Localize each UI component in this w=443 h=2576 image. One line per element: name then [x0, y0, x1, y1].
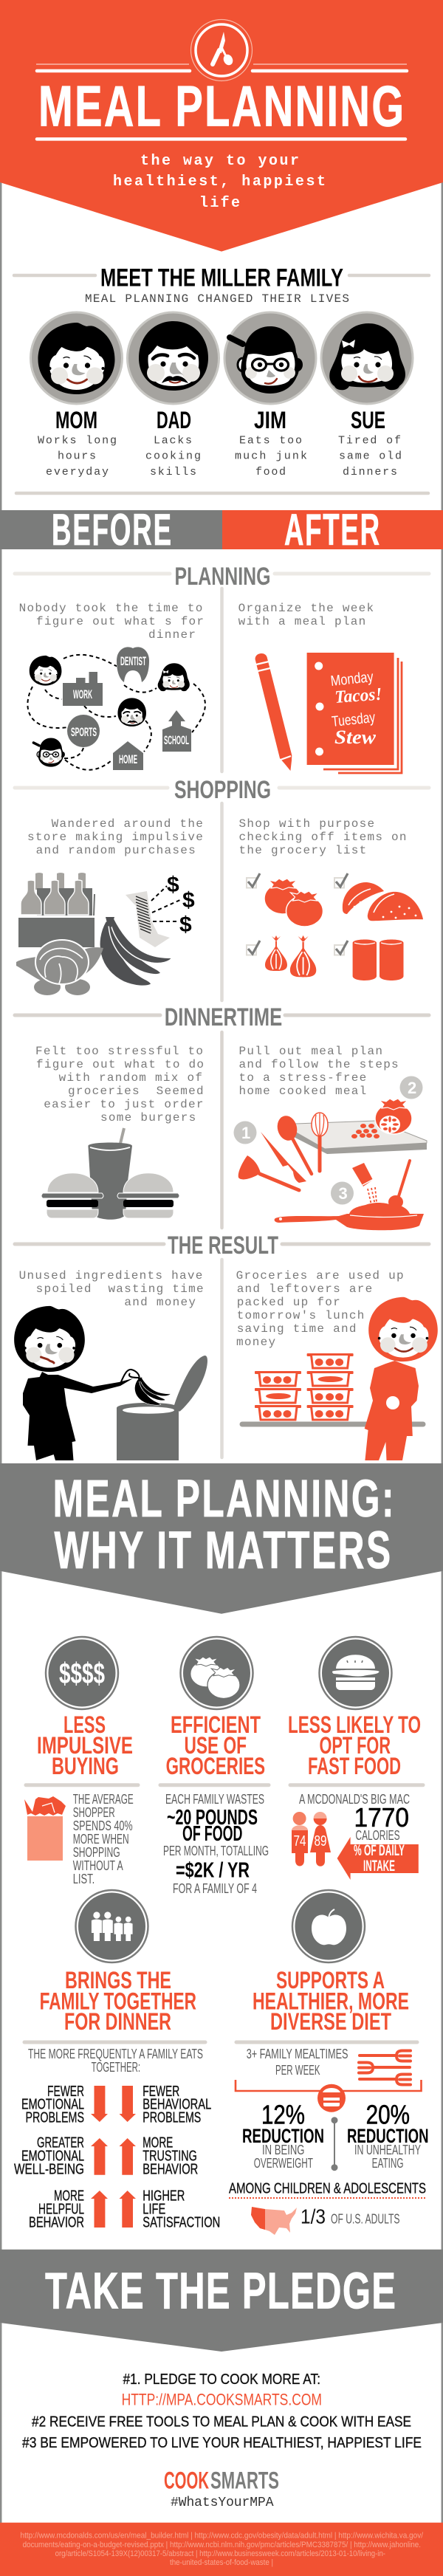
icon: tomato slice	[351, 1099, 412, 1138]
text: shopping before: store making impulsive	[27, 831, 204, 844]
text: planning before: dinner	[148, 628, 196, 642]
footer sources	[0, 2523, 443, 2576]
icon: school	[162, 710, 191, 752]
chaotic schedule map	[27, 647, 205, 770]
text: dinnertime before	[35, 1045, 205, 1124]
family: sue: SUE	[351, 407, 385, 433]
leftovers containers	[255, 1353, 354, 1420]
text: stat: FOR A FAMILY OF 4	[173, 1881, 257, 1896]
stat: 12 percent: IN BEING	[262, 2143, 304, 2157]
text: shopping after: checking off items on	[239, 831, 408, 844]
stat: 12 percent: OVERWEIGHT	[254, 2156, 313, 2171]
heading: SUPPORTS A	[276, 1967, 385, 1993]
icon: spatula	[238, 1155, 299, 1190]
family: dad	[127, 312, 219, 478]
title: MEAL PLANNING	[38, 74, 404, 139]
family: mom	[31, 312, 123, 478]
text: planning before: figure out what s for	[36, 615, 205, 628]
text: shopping after: Shop with purpose	[239, 817, 375, 831]
row: well-being and trust: EMOTIONAL	[21, 2149, 84, 2165]
section heading: shopping: SHOPPING	[174, 776, 271, 804]
text: planning after	[238, 602, 374, 628]
stat: 12 percent: REDUCTION	[242, 2125, 324, 2147]
before / after band	[0, 505, 443, 554]
text: mealtimes	[247, 2047, 348, 2078]
banner: why it matters: WHY IT MATTERS	[55, 1521, 391, 1579]
stat: calories: CALORIES	[356, 1828, 400, 1843]
text: result after: tomorrow's lunch	[237, 1309, 365, 1322]
panel: less impulsive buying	[24, 1637, 138, 1886]
cook smarts logo	[164, 2467, 279, 2510]
heading	[40, 1967, 196, 2035]
heading: LESS	[63, 1711, 106, 1738]
arrow: percent of daily intake: % OF DAILY	[354, 1842, 405, 1859]
row: helpful behavior and satisfaction	[29, 2188, 220, 2231]
banner: why it matters: MEAL PLANNING:	[53, 1469, 394, 1528]
text: dinnertime after: and follow the steps	[239, 1058, 399, 1071]
pledge steps	[22, 2371, 422, 2451]
stat: one third of adults: 1/3	[301, 2205, 326, 2228]
icon: knife	[261, 1132, 306, 1183]
text: result after	[236, 1269, 405, 1349]
icon: calorie people	[292, 1812, 331, 1866]
text: result after: packed up for	[237, 1296, 341, 1309]
text: result before	[19, 1269, 205, 1309]
small face: sue	[158, 663, 190, 691]
icon: home: HOME	[119, 752, 137, 766]
stat: 20 percent: EATING	[372, 2156, 404, 2171]
icon: receipt: $	[182, 888, 195, 913]
family: jim	[224, 312, 316, 478]
stat: 12 percent: 12%	[261, 2100, 305, 2130]
family: jim: Eats too	[239, 434, 302, 447]
family: jim: food	[255, 466, 286, 478]
icon: pencil	[255, 653, 292, 771]
text: stat: OF FOOD	[182, 1822, 242, 1846]
family: jim: JIM	[254, 407, 286, 433]
text: shopping before	[27, 817, 204, 857]
panel: efficient use of groceries	[160, 1637, 269, 1896]
icon: us map	[251, 2207, 297, 2235]
stat: 12 percent	[242, 2100, 324, 2171]
text: shopping after: the grocery list	[239, 844, 367, 857]
text: shopping before: and random purchases	[36, 844, 196, 857]
stat: one third of adults: OF U.S. ADULTS	[331, 2212, 400, 2227]
icon: apple	[292, 1890, 365, 1962]
family: dad: skills	[150, 466, 196, 478]
text: result before: and money	[124, 1296, 196, 1309]
panel: supports a healthier diet	[229, 1890, 428, 2235]
heading: meet the family: MEET THE MILLER FAMILY	[100, 264, 343, 292]
text: stat: SHOPPER	[73, 1805, 115, 1820]
text: stat: PER MONTH, TOTALLING	[163, 1844, 269, 1858]
step 2	[400, 1076, 422, 1099]
icon: work	[63, 672, 103, 706]
row: well-being and trust: BEHAVIOR	[142, 2161, 198, 2177]
row: helpful behavior and satisfaction: BEHAVIOR	[29, 2215, 84, 2231]
family: sue: Tired of	[338, 434, 401, 447]
family: sue: same old	[339, 450, 402, 462]
subtitle	[113, 153, 326, 212]
row: helpful behavior and satisfaction: HELPFUL	[38, 2202, 84, 2218]
row: well-being and trust: TRUSTING	[142, 2149, 197, 2165]
heading: OPT FOR	[319, 1732, 391, 1759]
row: helpful behavior and satisfaction: HIGHER	[142, 2188, 185, 2205]
text: result after: Groceries are used up	[236, 1269, 405, 1282]
text: planning after: Organize the week	[238, 602, 374, 615]
icon: notebook: Tacos!	[334, 685, 382, 707]
row: emotional and behavioral problems	[21, 2084, 211, 2126]
family: dad: Lacks	[154, 434, 192, 447]
section heading: planning: PLANNING	[174, 563, 270, 591]
icon: grocery bag	[24, 1796, 66, 1861]
step 3	[331, 1181, 354, 1205]
row: helpful behavior and satisfaction: SATISFACTION	[142, 2215, 220, 2231]
row: well-being and trust	[14, 2135, 198, 2177]
text: stat: SHOPPING	[73, 1845, 120, 1860]
heading: FOR DINNER	[64, 2008, 171, 2035]
family: mom: hours	[58, 450, 96, 462]
row: emotional and behavioral problems: PROBLEMS	[142, 2110, 201, 2126]
icon: three forks	[359, 2051, 411, 2085]
arrow: percent of daily intake	[337, 1837, 419, 1880]
text: intro	[28, 2047, 203, 2075]
text: stat: THE AVERAGE	[73, 1792, 134, 1807]
icon: spoiled bananas	[134, 1378, 171, 1405]
text: dinnertime after	[239, 1045, 399, 1098]
panel: brings the family together	[14, 1890, 220, 2231]
banner: take the pledge	[0, 2250, 443, 2352]
icon: home	[113, 741, 143, 770]
text: shopping after	[239, 817, 408, 857]
heading: EFFICIENT	[171, 1711, 261, 1738]
impulse groceries illustration	[16, 873, 195, 995]
checked: onions	[246, 935, 316, 977]
icon: pan	[275, 1161, 424, 1230]
icon: sports	[67, 715, 100, 747]
text: dinnertime after: Pull out meal plan	[239, 1045, 383, 1058]
cook smarts logo: #WhatsYourMPA	[171, 2496, 274, 2510]
text: stat: =$2K / YR	[176, 1859, 250, 1883]
icon: bananas	[100, 917, 172, 986]
row: emotional and behavioral problems: EMOTIONAL	[21, 2097, 84, 2113]
stat: one third of adults	[301, 2205, 400, 2228]
pledge steps: HTTP://MPA.COOKSMARTS.COM	[122, 2391, 322, 2409]
logo badge	[190, 19, 253, 81]
row: well-being and trust: GREATER	[37, 2135, 84, 2151]
icon: burger right	[117, 1173, 179, 1218]
row: well-being and trust: WELL-BEING	[14, 2161, 84, 2177]
arrow: percent of daily intake: INTAKE	[363, 1858, 395, 1875]
heading	[37, 1711, 133, 1779]
cooking steps illustration	[233, 1076, 427, 1230]
text: stat	[73, 1792, 134, 1886]
heading: meet the family	[14, 264, 429, 306]
heading: USE OF	[185, 1732, 247, 1759]
text: stat: EACH FAMILY WASTES	[165, 1792, 264, 1807]
icon: dentist: DENTIST	[120, 654, 146, 668]
heading	[288, 1711, 421, 1779]
small face: mom	[30, 656, 61, 686]
text: dinnertime before: easier to just order	[44, 1098, 205, 1111]
row: emotional and behavioral problems: BEHAVIORAL	[142, 2097, 211, 2113]
text: stat	[163, 1792, 269, 1896]
icon: receipt: $	[167, 873, 179, 897]
text: dinnertime before: some burgers	[100, 1111, 196, 1124]
text: dinnertime before: with random mix of	[59, 1071, 203, 1085]
icon: burger left	[41, 1173, 103, 1218]
heading: DIVERSE DIET	[270, 2008, 391, 2035]
icon: dentist	[117, 647, 149, 682]
family: mom: everyday	[46, 466, 109, 478]
icon: receipt: $	[179, 913, 192, 937]
small face: dad	[117, 698, 146, 727]
header banner	[0, 0, 443, 252]
icon: sports: SPORTS	[71, 725, 97, 739]
icon: tomatoes	[180, 1637, 253, 1709]
text: dinnertime before: groceries Seemed	[68, 1085, 205, 1098]
text: result before: Unused ingredients have	[19, 1269, 204, 1282]
subtitle: the way to your	[140, 153, 299, 170]
icon: notebook: Tuesday	[331, 710, 376, 730]
illustration: woman throwing food away	[14, 1306, 207, 1460]
icon: notebook: Monday	[330, 669, 374, 690]
row: emotional and behavioral problems: FEWER	[142, 2084, 179, 2100]
subtitle: healthiest, happiest	[113, 174, 326, 190]
bracket with burger badge	[236, 2080, 421, 2112]
illustration: leftovers on shelf	[242, 1297, 438, 1460]
panel: less likely to opt for fast food	[288, 1637, 423, 1880]
stat: calories: 1770	[354, 1802, 409, 1833]
text: intro: THE MORE FREQUENTLY A FAMILY EATS	[28, 2047, 203, 2061]
icon: beer pack	[18, 873, 95, 947]
footer sources: the-united-states-of-food-waste |	[170, 2558, 273, 2567]
footer sources: org/article/S1054-139X(12)00317-5/abstract | http://www.businessweek.com/articles/2013-01-10/living-in-	[55, 2549, 385, 2558]
family: dad: DAD	[157, 407, 191, 433]
icon: dollars	[46, 1637, 118, 1709]
stat: 20 percent: 20%	[366, 2100, 410, 2130]
text: intro: TOGETHER:	[92, 2060, 140, 2075]
step 3: 3	[338, 1184, 348, 1203]
pledge steps: #1. PLEDGE TO COOK MORE AT:	[123, 2371, 320, 2388]
banner: take the pledge: TAKE THE PLEDGE	[45, 2261, 396, 2320]
checked: cans	[334, 939, 403, 980]
text: result after: saving time and	[237, 1322, 357, 1336]
heading: BRINGS THE	[65, 1967, 171, 1993]
text: stat: LIST.	[73, 1872, 95, 1886]
cook smarts logo: SMARTS	[210, 2467, 279, 2494]
row: helpful behavior and satisfaction: MORE	[54, 2188, 84, 2205]
fast food illustration	[41, 1128, 179, 1220]
stat: 20 percent	[347, 2100, 428, 2171]
row: helpful behavior and satisfaction: LIFE	[142, 2202, 165, 2218]
banner: why it matters	[0, 1463, 443, 1614]
icon: burger	[319, 1637, 391, 1709]
text: shopping before: Wandered around the	[52, 817, 204, 831]
text: stat: MORE WHEN	[73, 1832, 129, 1847]
family: sue	[321, 312, 413, 478]
text: result after: money	[236, 1336, 276, 1349]
text: planning before: Nobody took the time to	[19, 602, 204, 615]
heading: FAMILY TOGETHER	[40, 1988, 196, 2015]
row: emotional and behavioral problems: FEWER	[47, 2084, 84, 2100]
meal plan notebook and pencil	[255, 653, 402, 773]
heading	[166, 1711, 265, 1779]
text: dinnertime before: figure out what to do	[36, 1058, 205, 1071]
icon: salt shaker	[352, 1163, 377, 1205]
family: mom: Works long	[38, 434, 117, 447]
subtitle: life	[199, 195, 240, 212]
text: stat: WITHOUT A	[73, 1858, 123, 1873]
icon: family	[75, 1890, 148, 1962]
text: mealtimes: 3+ FAMILY MEALTIMES	[247, 2047, 348, 2061]
checked: tacos	[334, 873, 424, 921]
text: dinnertime after: home cooked meal	[239, 1085, 367, 1098]
icon: cutting board	[294, 1121, 427, 1154]
family: sue: dinners	[343, 466, 397, 478]
text: stat: ~20 POUNDS	[167, 1806, 258, 1830]
small face: jim	[33, 738, 65, 767]
icon: trash can	[117, 1356, 207, 1460]
shopping list illustration	[246, 873, 424, 980]
icon: work: WORK	[73, 687, 92, 701]
checked: tomatoes	[246, 873, 323, 927]
icon: notebook: Stew	[334, 727, 377, 748]
step 1: 1	[241, 1124, 250, 1142]
icon: spoon	[275, 1113, 312, 1174]
heading: IMPULSIVE	[37, 1732, 133, 1759]
icon: calorie people: 74	[294, 1833, 306, 1849]
family: jim: much junk	[235, 450, 307, 462]
divider stem	[331, 2117, 338, 2171]
heading: BUYING	[52, 1753, 119, 1779]
icon: notebook	[307, 653, 402, 773]
icon: calorie people: 89	[315, 1833, 326, 1849]
step 2: 2	[408, 1079, 416, 1097]
family: mom: MOM	[55, 407, 97, 433]
icon: dollars: $$$$	[59, 1658, 105, 1690]
icon: receipt	[126, 873, 195, 947]
text: dinnertime after: to a stress-free	[239, 1071, 367, 1085]
icon: school: SCHOOL	[164, 733, 189, 747]
text: result after: and leftovers are	[237, 1282, 374, 1296]
icon: drink cup	[88, 1143, 132, 1220]
text: result before: spoiled wasting time	[36, 1282, 205, 1296]
text: planning after: with a meal plan	[238, 615, 367, 628]
heading	[253, 1967, 409, 2035]
family: dad: cooking	[145, 450, 201, 462]
text: mealtimes: PER WEEK	[275, 2063, 320, 2078]
cook smarts logo: COOK	[164, 2467, 209, 2494]
before / after band: BEFORE	[52, 505, 171, 554]
before / after band: AFTER	[284, 505, 380, 554]
section heading: dinnertime: DINNERTIME	[165, 1003, 282, 1031]
step 1	[233, 1121, 257, 1144]
text: planning before	[19, 602, 205, 642]
icon: cabbage	[16, 940, 103, 995]
heading: GROCERIES	[166, 1753, 265, 1779]
happy woman	[365, 1297, 438, 1460]
row: well-being and trust: MORE	[142, 2135, 173, 2151]
heading: meet the family: MEAL PLANNING CHANGED THEIR LIVES	[85, 292, 349, 306]
row: emotional and behavioral problems: PROBLEMS	[25, 2110, 84, 2126]
text: stat: SPENDS 40%	[73, 1818, 133, 1833]
section heading: the result: THE RESULT	[168, 1232, 278, 1260]
heading: FAST FOOD	[308, 1753, 401, 1779]
icon: whisk	[312, 1113, 328, 1171]
text: dinnertime before: Felt too stressful to	[35, 1045, 204, 1058]
